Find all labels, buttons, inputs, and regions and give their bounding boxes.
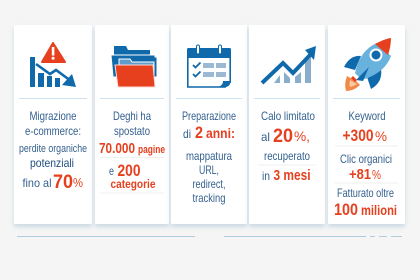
text: risultati: Clic organici [340,152,392,166]
icon: growth chart [262,46,316,83]
text: deghi [99,109,165,193]
text: deghi: pagine [138,144,165,156]
text: deghi: spostato [114,124,150,138]
text: calo [258,109,316,184]
text: preparazione: mappatura [186,149,232,163]
text: preparazione: anni: [206,125,235,141]
text: deghi: 200 [118,161,140,180]
text: risultati: Keyword [348,109,386,123]
text: calo: recuperato [264,149,310,163]
text: migrazione: % [73,175,83,190]
panel: deghi [95,25,169,224]
panel: migrazione [14,25,92,224]
icon: warning and falling chart [30,43,76,87]
text: deghi: Deghi ha [113,109,151,123]
text: preparazione: 2 [195,123,203,142]
text: risultati: +81 [349,166,371,183]
text: risultati: % [375,128,387,144]
text: calo: 20 [273,126,293,147]
text: calo: Calo limitato [261,109,315,123]
text: migrazione [19,109,87,193]
text: deghi: 70.000 [99,140,135,157]
text: preparazione: URL, [199,163,219,177]
panel: risultati [328,25,405,224]
icon: calendar [187,45,231,87]
text: calo: in [262,169,270,183]
text: calo: al [261,130,270,144]
panel: calo [249,25,325,224]
text: preparazione [182,109,236,205]
text: migrazione: perdite organiche [19,143,87,155]
panel: preparazione [171,25,247,224]
text: deghi: e [109,164,114,178]
text: risultati: 100 [334,200,358,219]
text: preparazione: di [183,127,191,141]
text: migrazione: e-commerce: [25,124,81,138]
text: migrazione: potenziali [30,156,74,170]
text: calo: %, [294,128,310,144]
text: risultati [334,109,398,219]
text: preparazione: redirect, [192,177,226,191]
text: preparazione: tracking [192,191,226,205]
text: preparazione: Preparazione [182,109,236,123]
text: risultati: Fatturato oltre [337,186,394,200]
text: risultati: % [372,167,381,182]
icon: rocket [344,38,391,91]
text: calo: 3 mesi [274,167,310,184]
text: migrazione: fino al [22,176,52,190]
icon: folders [111,46,157,87]
text: risultati: milioni [361,202,397,218]
text: risultati: +300 [342,126,374,145]
text: deghi: categorie [110,177,156,191]
text: migrazione: 70 [53,172,73,193]
text: migrazione: Migrazione [30,109,77,123]
